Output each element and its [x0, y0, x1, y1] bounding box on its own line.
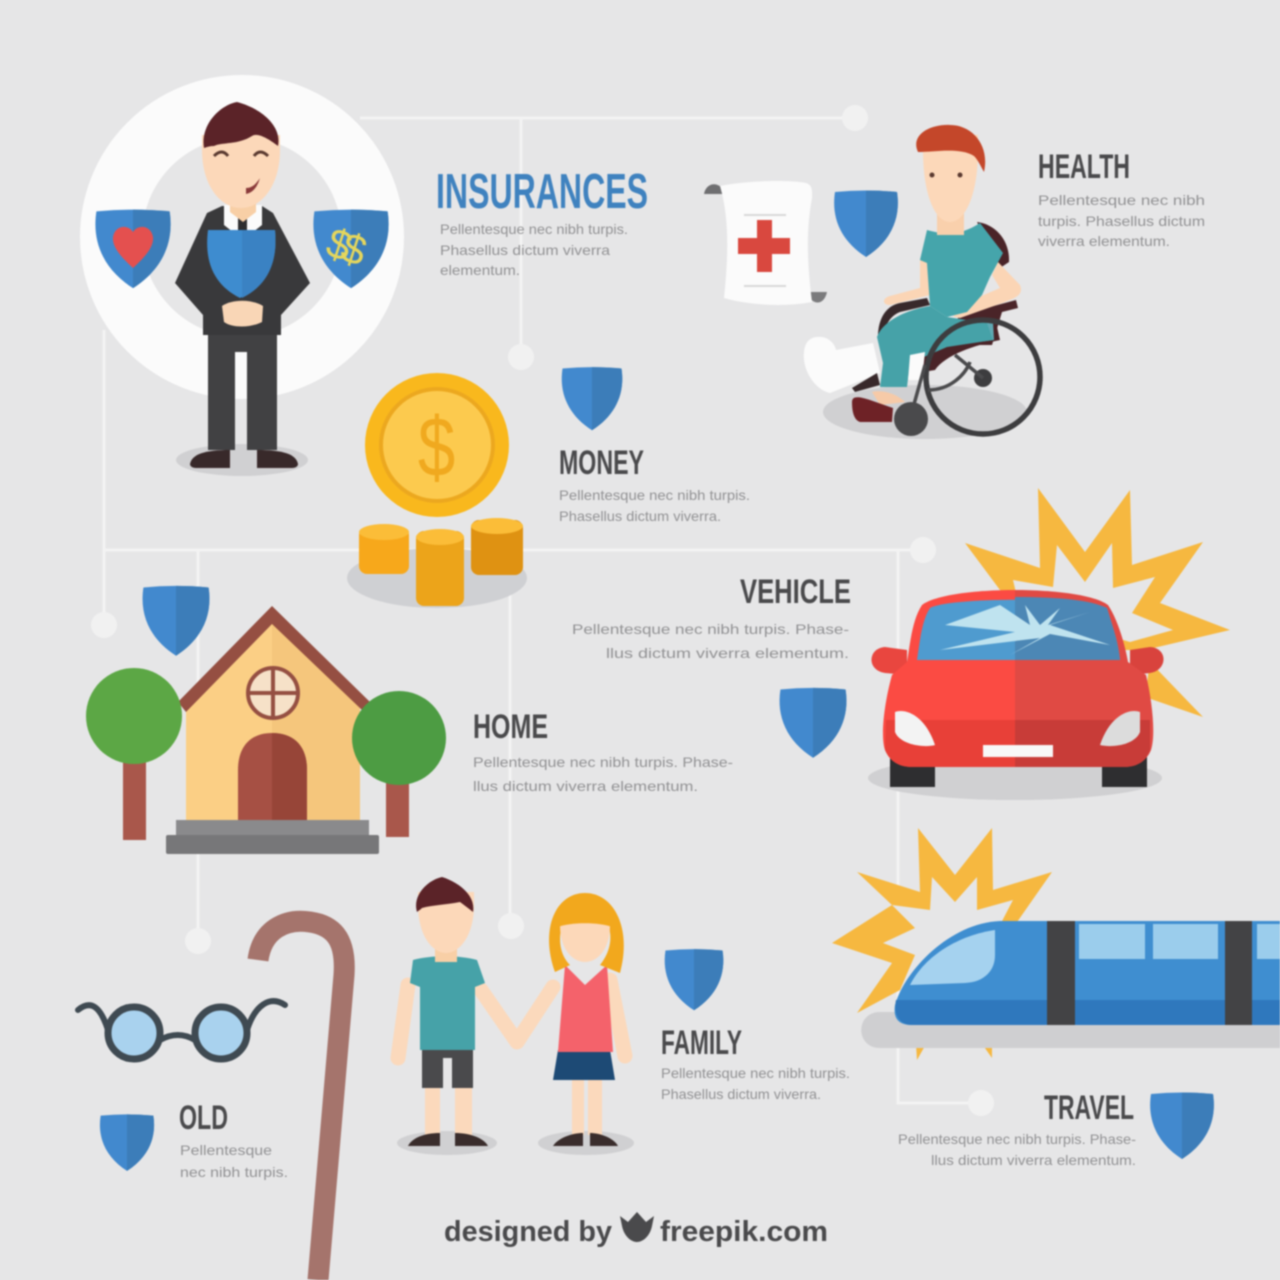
text block: health: [1038, 192, 1205, 249]
panel: house: [86, 606, 446, 854]
panel: red car: [868, 590, 1164, 800]
heading: money: MONEY: [559, 444, 644, 482]
icon: money shield: [562, 367, 622, 430]
icon: walking cane: [258, 921, 344, 1280]
icon: dollar shield: $$: [321, 218, 372, 275]
icon: glasses: [78, 1001, 285, 1059]
heading: old: OLD: [179, 1099, 228, 1137]
icon: heart shield: [95, 210, 171, 288]
text block: insurances: elementum.: [440, 262, 520, 278]
icon: home shield: [143, 586, 209, 656]
icon: old shield: [100, 1114, 154, 1171]
panel: train: [861, 921, 1280, 1048]
text block: health: turpis. Phasellus dictum: [1038, 213, 1205, 229]
panel: insurance agent: [95, 102, 389, 476]
text block: health: viverra elementum.: [1038, 233, 1170, 249]
heading: health: HEALTH: [1038, 148, 1130, 186]
credit: freepik: freepik.com: [660, 1216, 828, 1248]
heading: vehicle: VEHICLE: [740, 573, 851, 611]
text block: family: Phasellus dictum viverra.: [661, 1086, 821, 1102]
credit: freepik: designed by: [444, 1216, 612, 1248]
text block: old: [180, 1142, 288, 1180]
icon: dollar shield: [313, 210, 389, 288]
heading: home: HOME: [473, 708, 548, 746]
text block: travel: llus dictum viverra elementum.: [931, 1152, 1136, 1168]
icon: starburst behind train: [832, 828, 1052, 1060]
text block: vehicle: llus dictum viverra elementum.: [606, 645, 849, 661]
icon: medical scroll: [704, 181, 827, 305]
text block: insurances: Phasellus dictum viverra: [440, 242, 610, 258]
text block: travel: [898, 1131, 1136, 1168]
icon: travel shield: [1150, 1092, 1214, 1159]
text block: family: [661, 1065, 850, 1102]
heading: travel: TRAVEL: [1044, 1089, 1134, 1127]
text block: old: nec nibh turpis.: [180, 1164, 288, 1180]
text block: vehicle: Pellentesque nec nibh turpis. Phase-: [572, 621, 849, 637]
credit: freepik: [444, 1212, 828, 1248]
text block: money: Pellentesque nec nibh turpis.: [559, 487, 750, 503]
heading: family: FAMILY: [661, 1024, 742, 1062]
panel: coins: $: [418, 401, 455, 495]
text block: travel: Pellentesque nec nibh turpis. Phase-: [898, 1131, 1136, 1147]
icon: starburst behind car: [965, 488, 1230, 717]
agent figure: [175, 102, 310, 468]
icon: health shield: [834, 190, 898, 257]
panel: wheelchair patient: [804, 125, 1040, 439]
text block: home: [473, 754, 733, 794]
text block: home: llus dictum viverra elementum.: [473, 778, 698, 794]
icon: vehicle shield: [780, 688, 846, 758]
heading: insurances: INSURANCES: [436, 165, 648, 219]
panel: coins: [347, 373, 527, 608]
text block: family: Pellentesque nec nibh turpis.: [661, 1065, 850, 1081]
text block: money: [559, 487, 750, 524]
text block: insurances: Pellentesque nec nibh turpis.: [440, 221, 628, 237]
text block: old: Pellentesque: [180, 1142, 272, 1158]
text block: health: Pellentesque nec nibh: [1038, 192, 1205, 208]
text block: home: Pellentesque nec nibh turpis. Phase-: [473, 754, 733, 770]
text block: vehicle: [572, 621, 849, 661]
panel: family couple: [397, 877, 634, 1155]
icon: family shield: [665, 949, 723, 1010]
connector lines: [91, 105, 994, 1116]
text block: money: Phasellus dictum viverra.: [559, 508, 721, 524]
text block: insurances: [440, 221, 628, 278]
